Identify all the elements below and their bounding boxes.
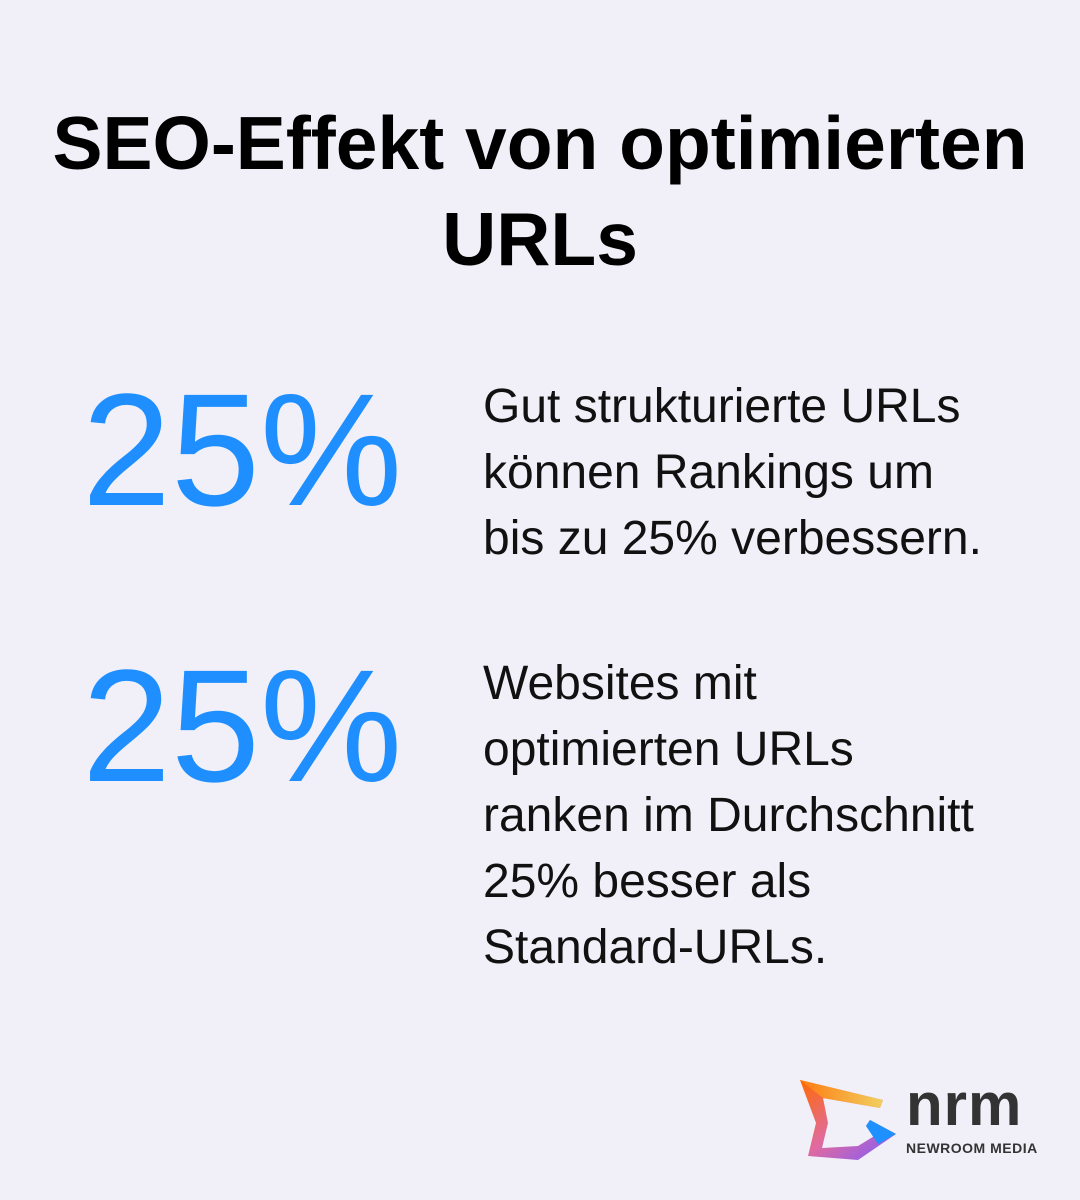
stat 2 number: 25% (82, 636, 402, 815)
logo: NEWROOM MEDIA (906, 1140, 1038, 1156)
stat 2 text (483, 657, 974, 974)
stat 1 text: können Rankings um (483, 446, 934, 499)
icon: logo mark (800, 1080, 896, 1160)
title: SEO-Effekt von optimierten (52, 101, 1028, 185)
title (52, 101, 1028, 281)
logo text: nrm (906, 1071, 1022, 1138)
stat 2 text: Websites mit (483, 657, 757, 710)
stat 1 text: bis zu 25% verbessern. (483, 512, 982, 565)
stat 1 text: Gut strukturierte URLs (483, 380, 960, 433)
stat 2 text: 25% besser als (483, 855, 811, 908)
stat 2 text: Standard-URLs. (483, 921, 827, 974)
stat 2 text: optimierten URLs (483, 723, 854, 776)
stat 1 number: 25% (82, 360, 402, 539)
title: URLs (442, 197, 638, 281)
logo (800, 1071, 1038, 1160)
stat 1 text (483, 380, 982, 565)
stat 2 text: ranken im Durchschnitt (483, 789, 974, 842)
